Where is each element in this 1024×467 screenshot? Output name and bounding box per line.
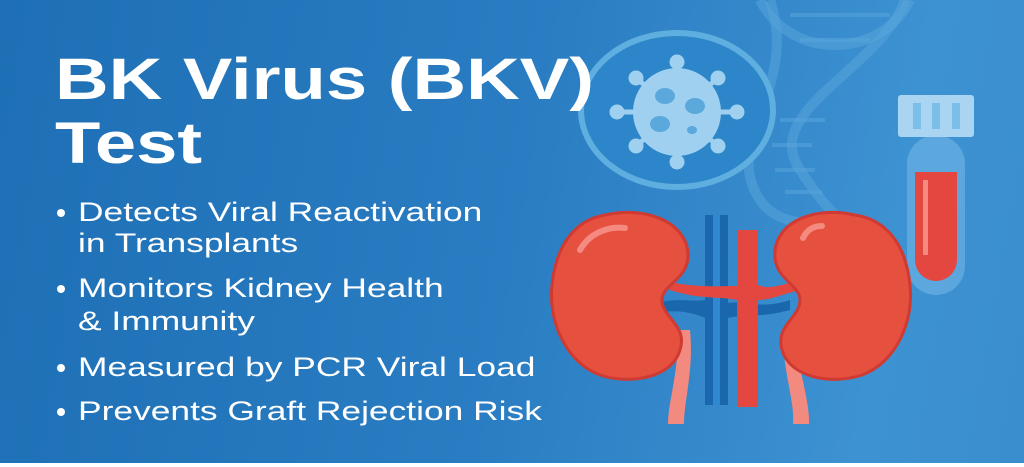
icon: virus in circle (581, 33, 773, 187)
icon: blood test tube (898, 95, 974, 295)
bullet 2: & Immunity (78, 306, 255, 336)
bullet 2 (57, 273, 444, 336)
icon: kidneys with vessels (551, 212, 911, 424)
bullet 1: Detects Viral Reactivation (78, 197, 482, 227)
icon: DNA helix (749, 0, 910, 230)
bullet 1: in Transplants (78, 228, 298, 258)
bullet 1 (57, 197, 482, 258)
title: Test (55, 111, 202, 176)
bullet 3: Measured by PCR Viral Load (78, 352, 535, 382)
title: BK Virus (BKV) (55, 47, 594, 112)
title (55, 47, 594, 176)
bullet 2: Monitors Kidney Health (78, 273, 444, 303)
bullet 4: Prevents Graft Rejection Risk (78, 396, 542, 426)
bullet list (57, 197, 542, 426)
